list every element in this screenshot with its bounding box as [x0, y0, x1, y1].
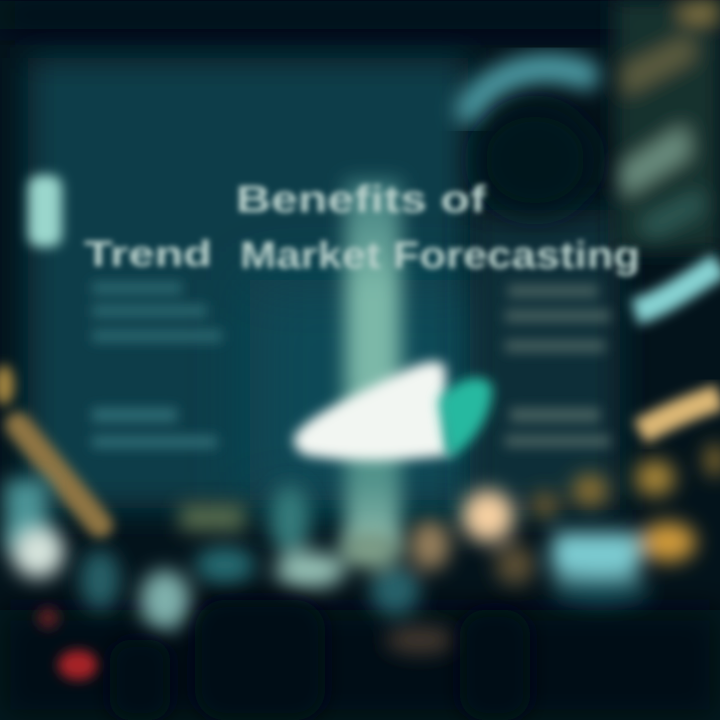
- top right swoosh: [470, 68, 585, 110]
- left icon bar: [28, 175, 62, 247]
- foreground dark figures: [110, 600, 530, 720]
- lower left glow: [5, 480, 120, 610]
- left gold spot: [0, 365, 14, 405]
- right gold streak: [640, 397, 720, 432]
- dark cloud behind swoosh: [475, 105, 595, 215]
- right arrow swoosh: [635, 265, 720, 312]
- heading: [84, 179, 640, 277]
- left text block one: [92, 282, 222, 342]
- title line two: Market Forecasting: [240, 235, 640, 277]
- teal cloud accent: [438, 378, 492, 458]
- left gold diagonal: [18, 425, 100, 525]
- white cloud: [294, 361, 450, 460]
- central column: [345, 180, 401, 550]
- red lights: [37, 607, 98, 680]
- right text block one: [505, 285, 610, 352]
- right building: [615, 0, 720, 250]
- title line one: Benefits of: [236, 179, 486, 221]
- crowd lights: [140, 444, 720, 654]
- left text block two: [92, 408, 217, 448]
- right text block two: [505, 408, 610, 447]
- left label: Trend: [84, 233, 212, 274]
